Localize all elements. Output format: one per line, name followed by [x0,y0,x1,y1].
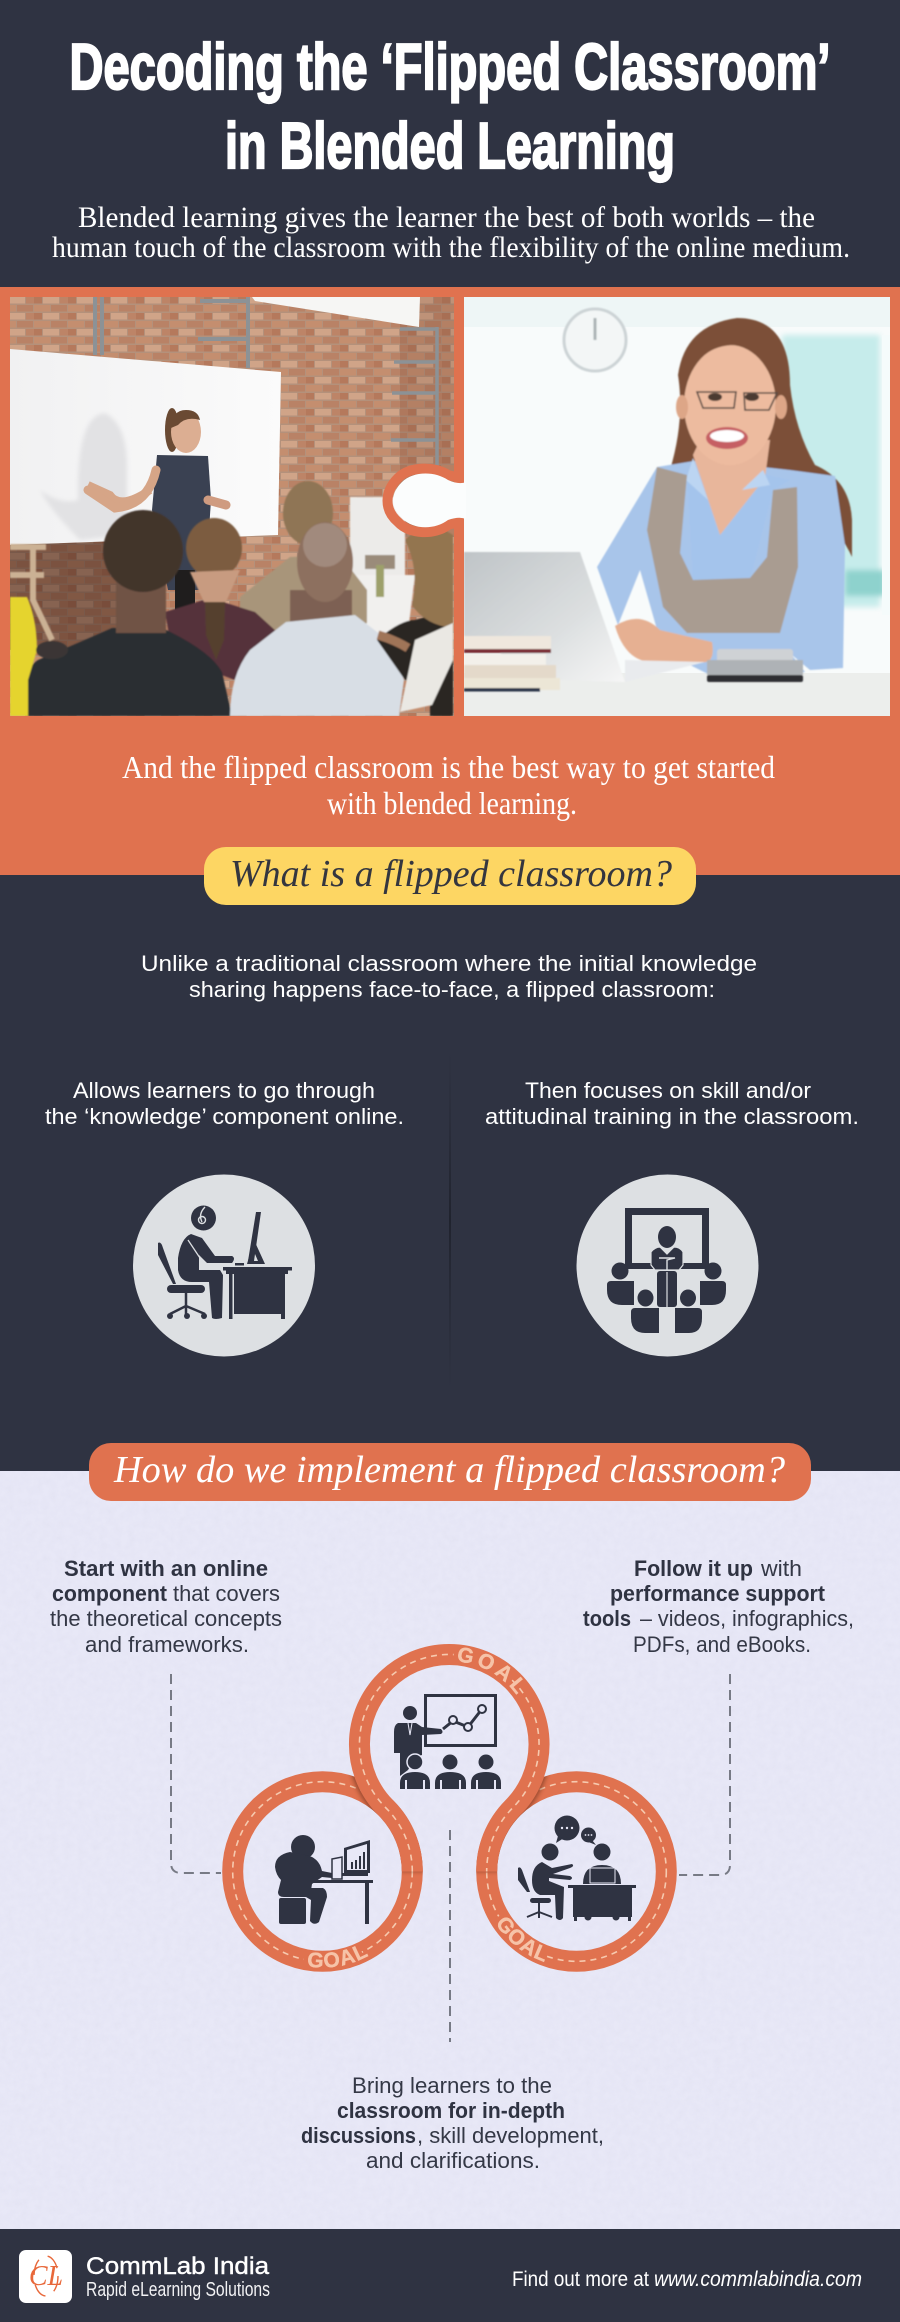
footer [0,2229,900,2322]
panel: what is a flipped classroom [0,847,900,1471]
step text: online component: Start with an online [64,1556,268,1581]
icon: learner at computer with headset [133,1174,315,1356]
step text: online component [50,1556,282,1657]
clock [564,309,626,371]
step text: classroom discussion: and clarifications. [366,2148,540,2173]
header band [0,0,900,287]
icon: classroom trainer with seated learners [576,1174,758,1356]
website call to action: www.commlabindia.com [654,2268,862,2291]
step text: classroom discussion: discussions [301,2123,416,2148]
step text: performance support: PDFs, and eBooks. [633,1632,811,1657]
title: in Blended Learning [225,109,675,182]
logo: CL [29,2261,63,2292]
column text: classroom: Then focuses on skill and/or [525,1078,812,1103]
company name: CommLab India [86,2253,270,2280]
step text: classroom discussion: Bring learners to the [352,2073,552,2098]
logo [19,2250,72,2303]
step text: online component: the theoretical concepts [50,1606,282,1631]
column text: online [45,1078,404,1129]
connector: left [171,1674,221,1873]
definition text [141,951,757,1002]
step text: classroom discussion: , skill development, [417,2123,604,2148]
step text: online component: component [52,1581,167,1606]
connector: center [449,1830,451,2042]
panel: how do we implement [0,1443,900,2229]
intro text: Blended learning gives the learner the best of both worlds – the [78,201,815,234]
goal rings: GOAL [498,1917,545,1962]
step text: performance support: with [760,1556,802,1581]
heading: What is a flipped classroom? [230,853,672,895]
step text: performance support [583,1556,854,1657]
goal rings: GOAL [308,1946,368,1968]
panel: orange photo band [0,287,900,875]
puzzle connector [388,297,459,716]
step text: performance support: – videos, infographics, [640,1606,854,1631]
step text: performance support: tools [583,1606,631,1631]
step text: classroom discussion [301,2073,604,2173]
goal rings [222,1644,677,1972]
intro text [52,201,850,264]
definition text: Unlike a traditional classroom where the initial knowledge [141,951,757,976]
photo: woman with laptop [464,297,890,716]
call to action text: And the flipped classroom is the best way to get started [122,749,775,785]
heading: How do we implement a flipped classroom? [113,1449,785,1491]
heading pill [89,1443,811,1501]
icon: presenter with audience [394,1696,501,1789]
icon: two people in discussion [518,1816,636,1921]
definition text: sharing happens face-to-face, a flipped classroom: [189,977,715,1002]
intro text: human touch of the classroom with the flexibility of the online medium. [52,231,850,264]
photo: instructor-led classroom [10,297,454,716]
heading pill [204,847,696,905]
step text: online component: and frameworks. [85,1632,249,1657]
website call to action [512,2268,862,2291]
connector: right [679,1674,730,1875]
goal rings: GOAL [458,1648,523,1695]
step text: classroom discussion: classroom for in-depth [337,2098,565,2123]
tagline: Rapid eLearning Solutions [86,2279,270,2301]
title [70,30,830,182]
column text: online: Allows learners to go through [73,1078,375,1103]
column text: classroom: attitudinal training in the classroom. [485,1104,859,1129]
puzzle tab [393,473,466,527]
step text: online component: that covers [173,1581,280,1606]
step text: performance support: performance support [610,1581,825,1606]
call to action text [122,749,775,821]
website call to action: Find out more at [512,2268,649,2291]
step text: performance support: Follow it up [634,1556,753,1581]
icon: person working at desk [275,1835,373,1924]
column text: classroom [485,1078,859,1129]
call to action text: with blended learning. [327,785,577,821]
column text: online: the ‘knowledge’ component online. [45,1104,404,1129]
